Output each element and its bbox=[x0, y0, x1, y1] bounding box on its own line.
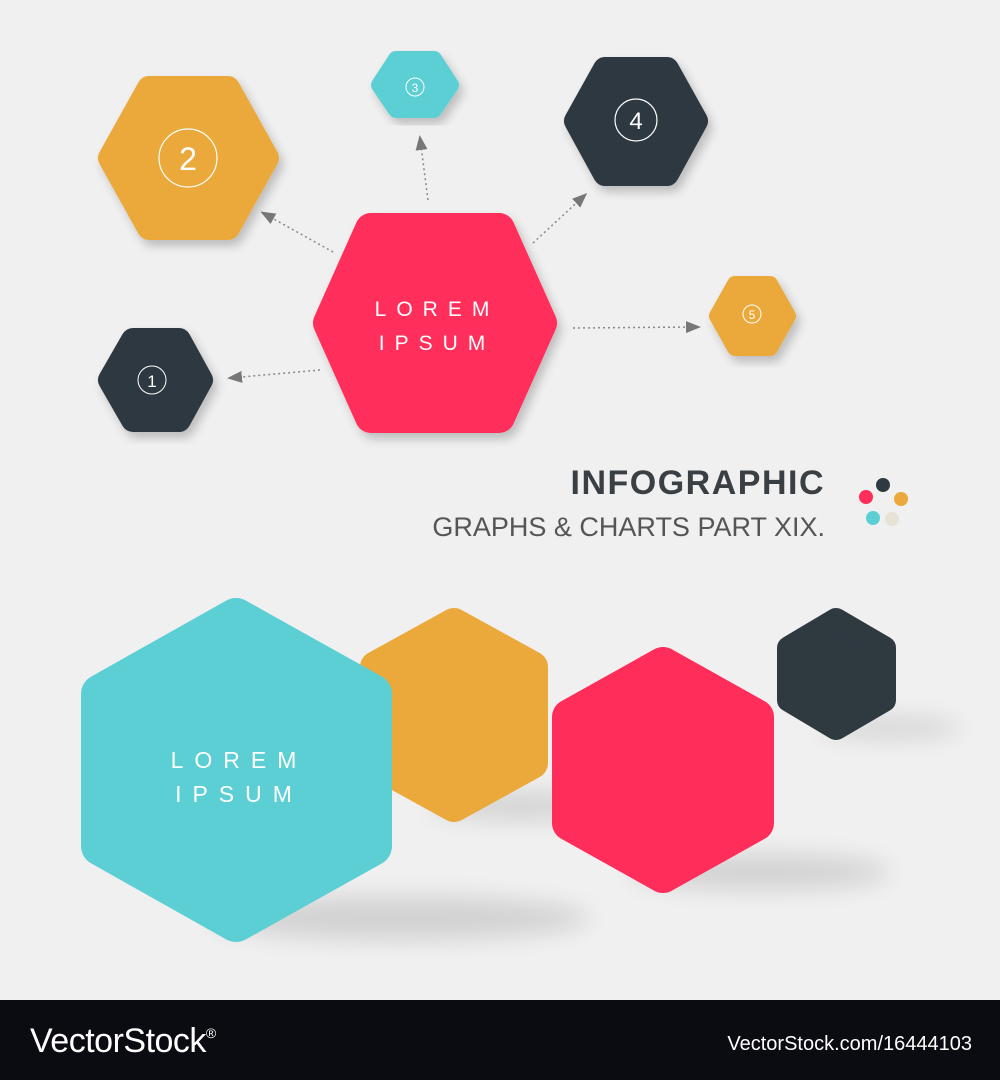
footer bar: VectorStock.com/16444103 bbox=[727, 1033, 972, 1055]
footer bar bbox=[0, 1000, 1000, 1080]
footer bar: VectorStock bbox=[30, 1022, 206, 1060]
bottom hexagon: orange bbox=[376, 624, 532, 806]
hexagon 1 (dark small): 1 bbox=[147, 372, 157, 391]
hexagon 2 (orange) bbox=[110, 88, 267, 228]
hexagon 4 (dark): 4 bbox=[629, 108, 643, 135]
hexagon 4 (dark) bbox=[576, 69, 696, 174]
footer bar: ® bbox=[206, 1025, 217, 1041]
bottom hexagon: dark bbox=[789, 620, 884, 728]
title: GRAPHS & CHARTS PART XIX. bbox=[432, 512, 825, 542]
bottom hexagon: teal with text bbox=[101, 618, 372, 922]
shadows of bottom hexagons bbox=[210, 718, 960, 940]
central hexagon (pink): LOREM bbox=[375, 298, 499, 321]
bottom hexagon: teal with text: IPSUM bbox=[175, 781, 303, 807]
bottom hexagon: pink bbox=[570, 665, 756, 875]
hexagon 3 (teal small) bbox=[379, 59, 451, 110]
hexagon 1 (dark small) bbox=[110, 340, 201, 420]
hexagon 5 (orange small) bbox=[717, 284, 788, 348]
hexagon 2 (orange): 2 bbox=[179, 141, 197, 177]
hexagon 3 (teal small): 3 bbox=[412, 81, 419, 95]
logo dots bbox=[859, 478, 908, 526]
arrows bbox=[230, 138, 698, 378]
title: INFOGRAPHIC bbox=[570, 464, 825, 502]
title bbox=[432, 464, 825, 542]
hexagon 5 (orange small): 5 bbox=[749, 308, 756, 322]
central hexagon (pink): IPSUM bbox=[379, 332, 495, 355]
bottom hexagon: teal with text: LOREM bbox=[171, 747, 307, 773]
central hexagon (pink) bbox=[329, 229, 541, 417]
